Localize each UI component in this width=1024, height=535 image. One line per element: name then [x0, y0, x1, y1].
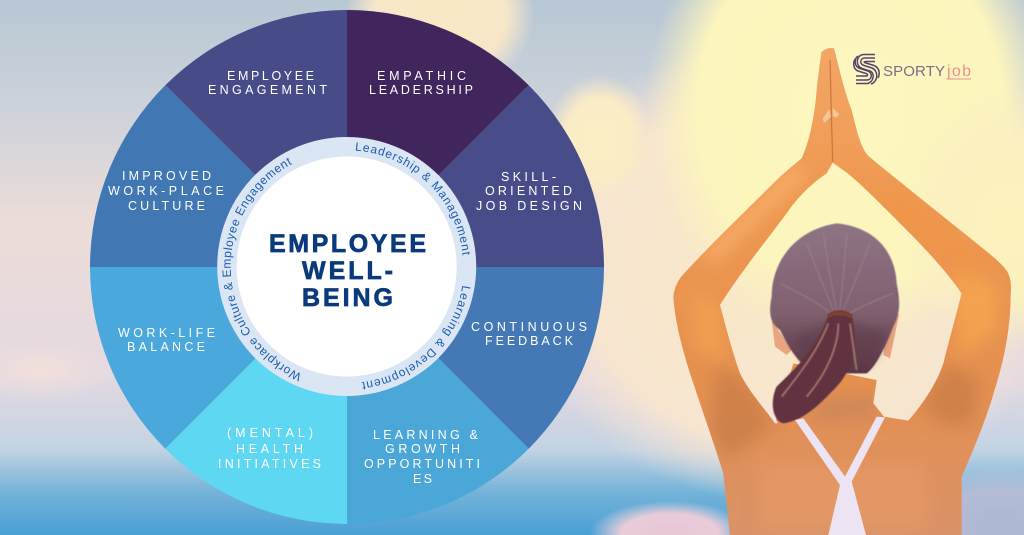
wedge: work-life balance — [90, 267, 347, 449]
label: improved work-place culture: WORK-PLACE — [108, 184, 224, 198]
wedge: improved work-place culture — [90, 85, 347, 267]
label: skill-oriented job design: JOB DESIGN — [476, 199, 582, 213]
label: mental health initiatives: INITIATIVES — [218, 457, 321, 471]
ring text: leadership and management: Leadership & Management — [356, 142, 470, 256]
fingernails and thumbs — [823, 108, 839, 123]
label: learning and growth opportunities: ES — [413, 472, 432, 486]
wheel: employee well-being — [90, 10, 604, 524]
hair — [770, 223, 899, 373]
wedge: skill-oriented job design — [347, 85, 604, 267]
label: continuous feedback: CONTINUOUS — [471, 320, 587, 334]
center title: WELL- — [302, 257, 393, 285]
label: improved work-place culture: CULTURE — [128, 199, 205, 213]
label: empathic leadership: EMPATHIC — [377, 69, 466, 83]
wedge: continuous feedback — [347, 267, 604, 449]
label: improved work-place culture: IMPROVED — [122, 169, 211, 183]
skin: arms, hands and back — [673, 48, 1011, 535]
inner ring — [217, 137, 476, 396]
label: employee engagement: ENGAGEMENT — [208, 83, 327, 97]
dark shadow under the hair tie — [793, 323, 887, 367]
label: mental health initiatives: (MENTAL) — [227, 426, 313, 440]
photo: woman with raised arms, seen from behind — [673, 48, 1011, 535]
label: work-life balance: WORK-LIFE — [118, 326, 215, 340]
label: skill-oriented job design: SKILL- — [501, 170, 556, 184]
logo text: SPORTY: SPORTY — [883, 63, 945, 80]
wedge: mental health initiatives — [165, 267, 347, 524]
label: learning and growth opportunities: LEARNING & — [373, 428, 479, 442]
finger line between the palms — [830, 60, 833, 162]
ring text: workplace culture and employee engagement: Workplace Culture & Employee Engagement — [222, 158, 300, 382]
label: continuous feedback: FEEDBACK — [485, 334, 574, 348]
label: work-life balance: BALANCE — [127, 340, 205, 354]
light and shade on skin — [697, 168, 996, 456]
label: learning and growth opportunities: OPPORTUNITI — [364, 457, 480, 471]
logo: SportyJob — [854, 54, 971, 84]
swimsuit straps — [795, 417, 885, 535]
label: employee engagement: EMPLOYEE — [227, 69, 314, 83]
left strap fragment — [768, 407, 777, 423]
logo text: job: job — [946, 63, 971, 80]
center title: BEING — [302, 284, 393, 312]
ring text: learning and development: Learning & Development — [362, 286, 470, 390]
wedge: employee engagement — [165, 10, 347, 267]
hair strands — [780, 233, 893, 313]
ponytail — [773, 315, 855, 423]
wedge: learning and growth opportunities — [347, 267, 529, 524]
label: learning and growth opportunities: GROWTH — [385, 442, 460, 456]
center disc — [237, 156, 457, 376]
ponytail highlights — [782, 323, 857, 397]
ears — [772, 313, 899, 358]
label: mental health initiatives: HEALTH — [236, 442, 303, 456]
logo underline — [947, 78, 971, 80]
logo mark: striped S — [854, 54, 879, 84]
label: skill-oriented job design: ORIENTED — [485, 184, 572, 198]
label: empathic leadership: LEADERSHIP — [369, 83, 473, 97]
center title: EMPLOYEE — [269, 230, 426, 258]
hair tie — [828, 312, 852, 317]
wedge: empathic leadership — [347, 10, 529, 267]
